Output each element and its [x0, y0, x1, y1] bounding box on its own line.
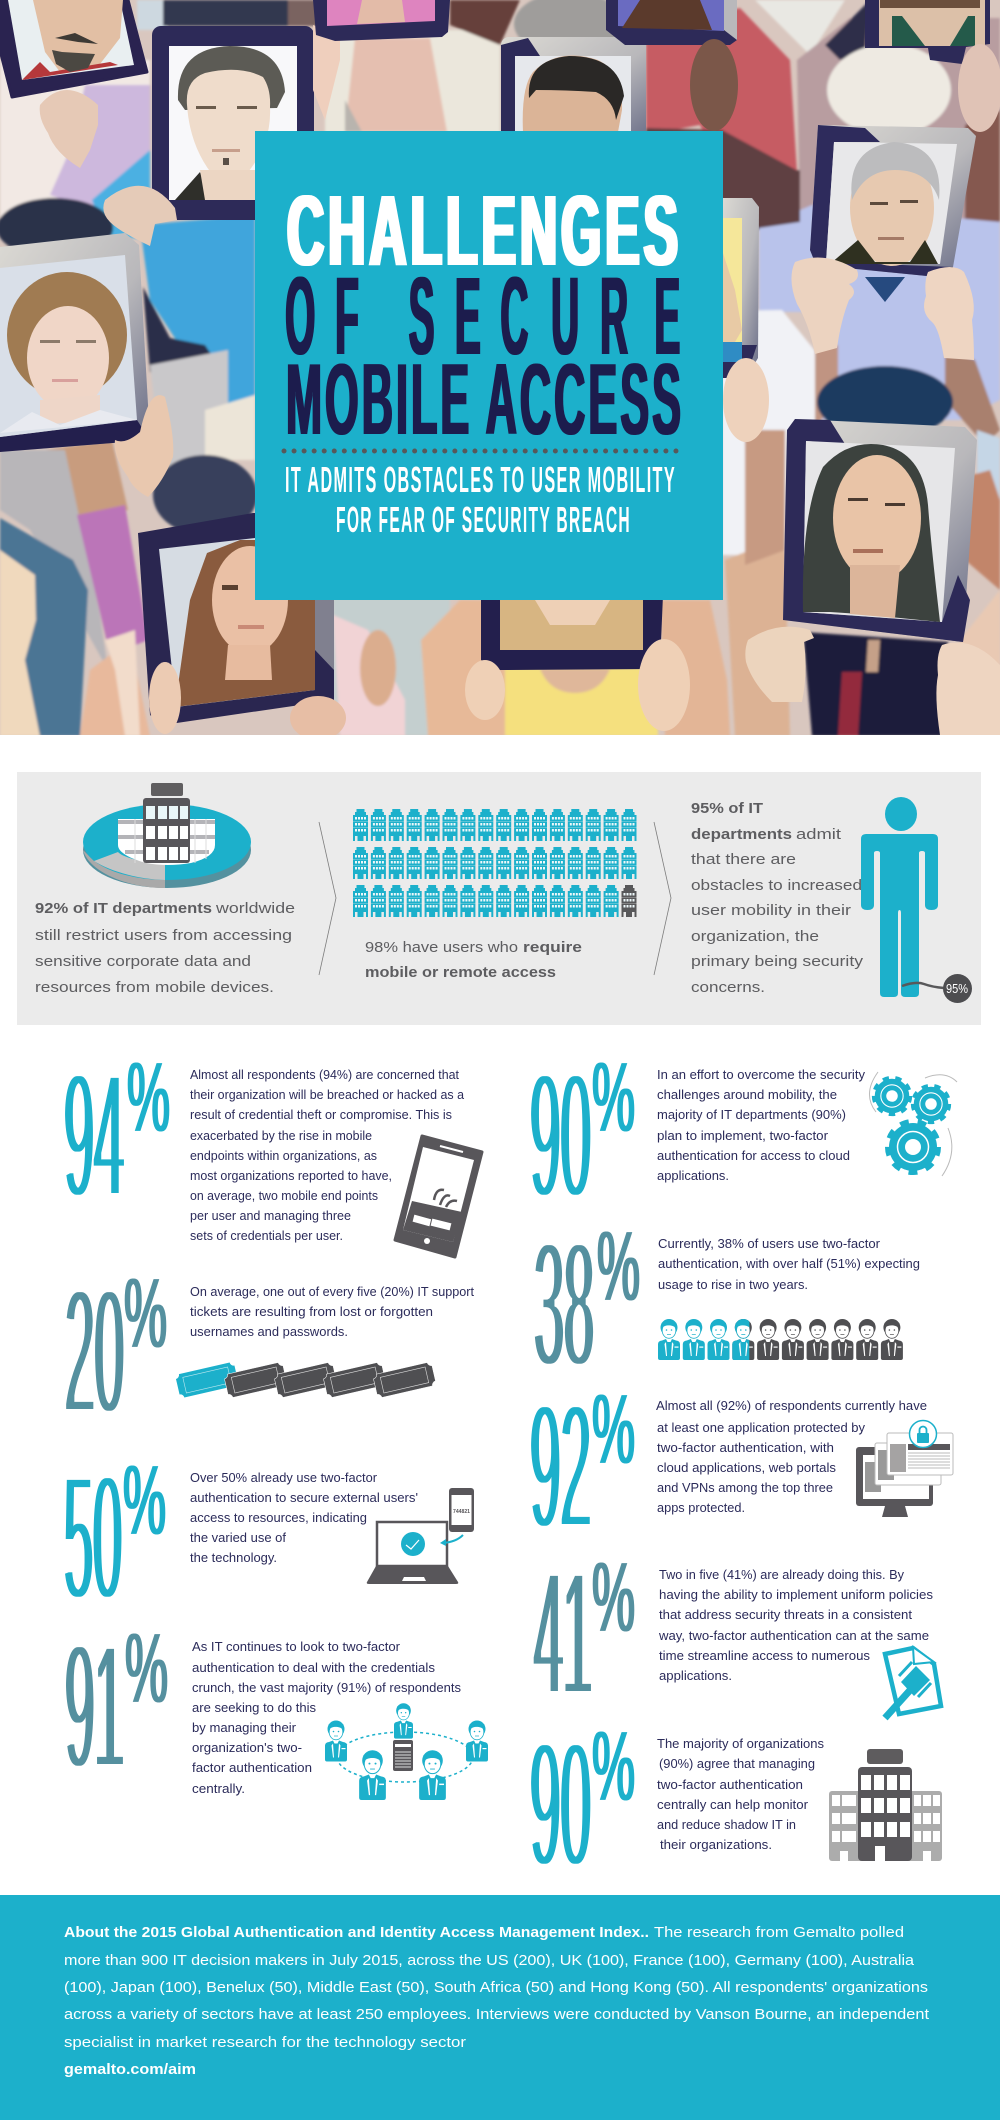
description: authentication for access to cloud: [657, 1148, 850, 1163]
text: 95% obstacles: primary being security: [691, 954, 864, 970]
description: As IT continues to look to two-factor: [192, 1639, 401, 1654]
tablet: woman with dark hair: [783, 419, 977, 642]
description: applications.: [657, 1168, 729, 1183]
icon: laptop and phone token: 744821: [453, 1509, 470, 1515]
stat: 90 percent shadow IT: 90: [530, 1707, 591, 1903]
pictogram: 98 percent building array: [353, 809, 636, 917]
description: organization's two-: [192, 1740, 302, 1755]
hand: [103, 186, 177, 246]
text: 95% obstacles: obstacles to increased: [691, 878, 862, 894]
stat: 41 percent: %: [592, 1542, 635, 1652]
tablet: woman with green top: [865, 0, 990, 64]
text: 95% obstacles: admit: [796, 827, 841, 843]
description: In an effort to overcome the security: [657, 1067, 865, 1082]
stat: 94 percent: [64, 1038, 482, 1257]
title: of secure: OF SECURE: [285, 255, 680, 378]
description: factor authentication: [192, 1760, 312, 1775]
stat: 92 percent: 92: [530, 1369, 591, 1565]
tablet: girl with long hair: [138, 513, 334, 725]
stat: 90 percent shadow IT: %: [592, 1711, 635, 1821]
hands holding tablet: [465, 639, 690, 731]
icon: office building: [829, 1749, 942, 1861]
text: 98% require mobile access: 98% have users who: [365, 940, 518, 956]
description: usernames and passwords.: [190, 1324, 348, 1339]
description: by managing their: [192, 1720, 297, 1735]
description: [657, 1736, 824, 1852]
tablet: pink screen: [313, 0, 450, 41]
description: Over 50% already use two-factor: [190, 1470, 378, 1485]
icon: person chained to 95 percent ball: 95%: [946, 981, 968, 996]
description: authentication to deal with the credentials: [192, 1660, 435, 1675]
description: exacerbated by the rise in mobile: [190, 1128, 372, 1143]
about the research text: The research from Gemalto polled: [654, 1924, 904, 1941]
description: (90%) agree that managing: [659, 1756, 815, 1771]
about the research text: across a variety of sectors have at least 250 employees. Interviews were conducted by Vanson Bourne, an independent: [64, 2006, 930, 2023]
about the research text: [64, 1924, 930, 2051]
subtitle: [285, 459, 676, 540]
title panel: [255, 131, 723, 600]
description: time streamline access to numerous: [659, 1648, 870, 1663]
description: on average, two mobile end points: [190, 1188, 378, 1203]
description: are seeking to do this: [192, 1700, 316, 1715]
stat: 90 percent cloud: [530, 1038, 957, 1234]
description: their organization will be breached or hacked as a: [190, 1087, 465, 1102]
description: Two in five (41%) are already doing this. By: [659, 1567, 904, 1582]
hands holding tablet: [745, 627, 1000, 735]
icon: network of users around a server: [325, 1703, 488, 1800]
background clothing and bodies: [0, 0, 1000, 736]
description: majority of IT departments (90%): [657, 1107, 846, 1122]
text: 92% restrict access: worldwide: [215, 901, 295, 917]
description: and reduce shadow IT in: [657, 1817, 796, 1832]
text: 98% require mobile access: mobile or remote access: [365, 965, 556, 981]
icon: five support tickets: [175, 1362, 436, 1398]
description: endpoints within organizations, as: [190, 1148, 377, 1163]
text: 95% obstacles: 95% of IT: [691, 801, 763, 817]
tablet: silver haired man: [810, 125, 976, 277]
hero photo collage of people holding tablets: [0, 0, 1000, 740]
description: [658, 1567, 933, 1683]
stat: 50 percent: [64, 1440, 474, 1636]
text: 92% restrict access: 92% of IT departments: [35, 901, 212, 917]
description: The majority of organizations: [657, 1736, 824, 1751]
icon: pie chart with office building: [83, 783, 251, 888]
stat: 41 percent: 41: [534, 1536, 592, 1732]
text: 95% obstacles: departments: [691, 827, 792, 843]
stat: 91 percent: [65, 1609, 488, 1805]
subtitle: FOR FEAR OF SECURITY BREACH: [336, 499, 631, 540]
about the research text: (100), Japan (100), Benelux (50), Middle East (50), South Africa (50) and Hong Kong (50). All respondents' organizations: [64, 1979, 928, 1996]
text: 92% restrict access: still restrict users from accessing: [35, 928, 292, 944]
pictogram: ten users, 38 percent highlighted: [658, 1319, 903, 1360]
text: 98% require mobile access: [365, 940, 582, 981]
hand holding tablet: [115, 395, 173, 497]
description: per user and managing three: [190, 1208, 351, 1223]
text: 92% restrict access: sensitive corporate data and: [35, 954, 251, 970]
description: [192, 1639, 461, 1796]
description: centrally can help monitor: [657, 1797, 809, 1812]
text: 95% obstacles: concerns.: [691, 980, 765, 996]
text: 95% obstacles: that there are: [691, 852, 796, 868]
description: crunch, the vast majority (91%) of respondents: [192, 1680, 461, 1695]
stat: 20 percent: [65, 1254, 474, 1450]
dark-skinned hand: [690, 39, 738, 131]
icon: laptop and phone token: [367, 1488, 474, 1584]
text: 95% obstacles: [691, 801, 864, 996]
description: Currently, 38% of users use two-factor: [658, 1236, 881, 1251]
description: the technology.: [190, 1550, 277, 1565]
tablet: yellow behind title: [722, 198, 759, 378]
description: [190, 1067, 465, 1243]
description: [656, 1398, 927, 1515]
description: two-factor authentication: [657, 1777, 803, 1792]
description: result of credential theft or compromise. This is: [190, 1107, 452, 1122]
hand with painted nails: [313, 25, 340, 120]
description: authentication to secure external users': [190, 1490, 418, 1505]
chevron divider: [654, 822, 671, 975]
description: at least one application protected by: [657, 1420, 865, 1435]
stat: 38 percent: [534, 1232, 920, 1364]
description: [190, 1470, 418, 1565]
stat: 92 percent: %: [592, 1374, 635, 1484]
description: two-factor authentication, with: [657, 1440, 834, 1455]
description: plan to implement, two-factor: [657, 1128, 829, 1143]
description: [658, 1236, 920, 1292]
description: authentication, with over half (51%) expecting: [658, 1256, 920, 1271]
stat: 50 percent: 50: [64, 1440, 122, 1636]
text: 92% restrict access: resources from mobile devices.: [35, 980, 274, 996]
description: challenges around mobility, the: [657, 1087, 837, 1102]
description: [657, 1067, 865, 1183]
stat: 90 percent cloud: %: [592, 1042, 635, 1152]
tablet: man in blue shirt: [606, 0, 737, 45]
description: [190, 1284, 474, 1339]
stat: 94 percent: 94: [64, 1038, 124, 1234]
description: applications.: [659, 1668, 732, 1683]
description: On average, one out of every five (20%) IT support: [190, 1284, 474, 1299]
text: 95% obstacles: user mobility in their: [691, 903, 851, 919]
stat: 41 percent: [534, 1536, 941, 1732]
description: most organizations reported to have,: [190, 1168, 392, 1183]
hand: [723, 358, 769, 442]
stat: 20 percent: 20: [65, 1254, 124, 1450]
description: and VPNs among the top three: [657, 1480, 833, 1495]
hands holding tablet: [149, 662, 346, 740]
text: 92% restrict access: [35, 901, 295, 996]
website link text: gemalto.com/aim: [64, 2061, 196, 2078]
chevron divider: [319, 822, 336, 975]
stat: 20 percent: %: [124, 1258, 167, 1368]
stat: 38 percent: %: [597, 1211, 640, 1321]
description: Almost all respondents (94%) are concerned that: [190, 1067, 459, 1082]
description: centrally.: [192, 1781, 245, 1796]
stat: 91 percent: 91: [65, 1609, 124, 1805]
icon: gears: [869, 1072, 957, 1176]
stat: 38 percent: 38: [534, 1207, 594, 1403]
description: cloud applications, web portals: [657, 1460, 836, 1475]
description: that address security threats in a consistent: [659, 1607, 912, 1622]
description: tickets are resulting from lost or forgotten: [190, 1304, 433, 1319]
text: 95% obstacles: organization, the: [691, 929, 819, 945]
hand: [40, 90, 98, 168]
description: sets of credentials per user.: [190, 1228, 343, 1243]
stat: 50 percent: %: [123, 1445, 166, 1555]
hands holding tablet: [791, 258, 974, 360]
about the research text: more than 900 IT decision makers in July 2015, across the US (200), UK (100), France (100), Germany (100), Australia: [64, 1952, 915, 1969]
description: usage to rise in two years.: [658, 1277, 808, 1292]
tablet: blonde woman: [481, 595, 663, 670]
tablet: short dark hair boy: [501, 37, 646, 131]
stat: 91 percent: %: [125, 1613, 168, 1723]
stat: 92 percent: [530, 1369, 953, 1565]
about the research text: About the 2015 Global Authentication and Identity Access Management Index..: [64, 1924, 649, 1941]
tablet: woman with brown bob: [0, 233, 150, 452]
tablet: man with dark hair: [152, 26, 314, 220]
stat: 90 percent cloud: 90: [530, 1038, 591, 1234]
hand: [958, 44, 1000, 132]
text: 98% require mobile access: require: [523, 940, 582, 956]
description: having the ability to implement uniform policies: [659, 1587, 933, 1602]
icon: policy document with gavel: [885, 1647, 941, 1718]
description: apps protected.: [657, 1500, 745, 1515]
panel: summary statistics band: [17, 772, 981, 1025]
tablet: man with goatee: [0, 0, 147, 97]
description: the varied use of: [190, 1530, 286, 1545]
description: their organizations.: [660, 1837, 772, 1852]
stat: 90 percent shadow IT: [530, 1707, 942, 1903]
description: access to resources, indicating: [190, 1510, 367, 1525]
icon: monitor with locked application windows: [856, 1420, 953, 1517]
footer panel: [0, 1895, 1000, 2120]
stat: 94 percent: %: [127, 1042, 170, 1152]
icon: phone with hacker hand: [395, 1136, 482, 1257]
icon: person chained to 95 percent ball: [861, 797, 972, 1003]
description: way, two-factor authentication can at the same: [658, 1628, 929, 1643]
about the research text: specialist in market research for the technology sector: [64, 2034, 466, 2051]
description: Almost all (92%) of respondents currently have: [656, 1398, 927, 1413]
